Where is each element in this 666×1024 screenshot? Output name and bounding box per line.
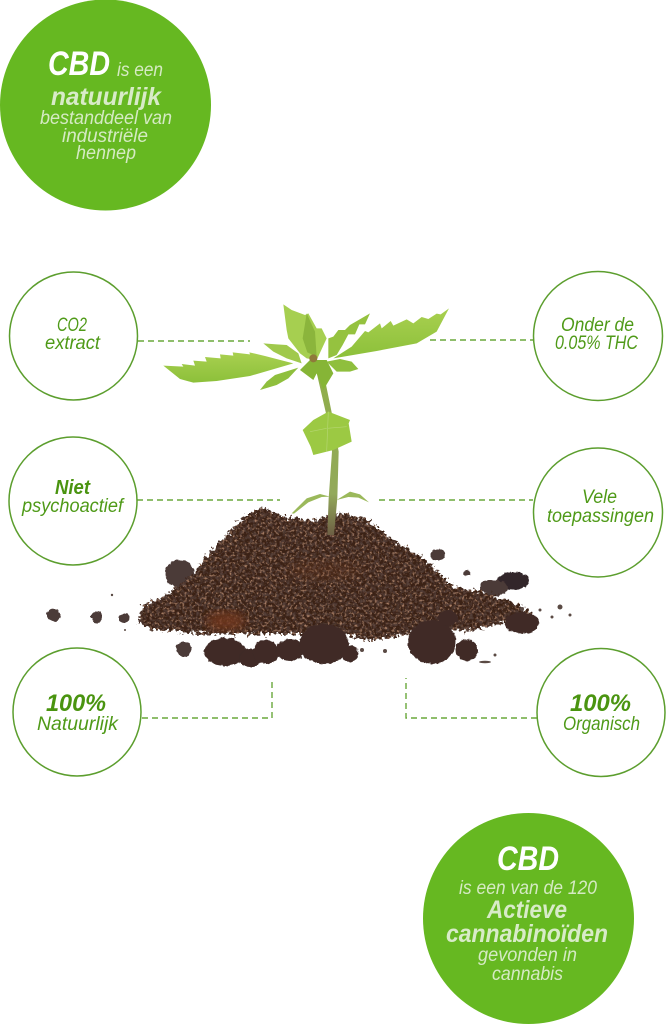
callout: CBD natural component: is een: [117, 60, 163, 81]
soil crumbs: [111, 594, 572, 663]
badge: Niet psychoactief: Niet: [55, 477, 91, 499]
connector: not psychoactive: [137, 499, 280, 501]
badge: Vele toepassingen: toepassingen: [547, 506, 654, 527]
callout: CBD natural component: bestanddeel van: [40, 108, 172, 129]
badge: Niet psychoactief: psychoactief: [21, 496, 125, 517]
connector: 100% organic: [406, 678, 537, 718]
large right leaf: [333, 308, 449, 358]
badge: 100% Organisch: 100%: [570, 690, 631, 717]
callout: CBD active cannabinoids: gevonden in: [478, 945, 577, 966]
badge: CO2 extract: [10, 272, 138, 400]
badge: Onder de 0.05% THC: [534, 272, 662, 400]
badge: Onder de 0.05% THC: 0.05% THC: [555, 333, 638, 354]
callout: CBD natural component: industriële: [62, 126, 148, 147]
badge: 100% Natuurlijk: Natuurlijk: [37, 714, 120, 735]
upper right small leaf: [328, 313, 370, 358]
lower central leaves: [300, 360, 333, 390]
loose clods behind: [48, 549, 529, 656]
stem: [316, 370, 339, 535]
connector: under 0.05% THC: [430, 339, 533, 341]
badge: 100% Natuurlijk: [13, 648, 141, 776]
illustration: soil pile: [48, 507, 572, 667]
connector: many applications: [379, 499, 533, 501]
callout: CBD active cannabinoids: is een van de 120: [459, 878, 597, 899]
badge: 100% Organisch: [537, 648, 665, 776]
small lower left leaf: [260, 368, 298, 390]
badge: Vele toepassingen: Vele: [582, 487, 617, 508]
small left leaf: [263, 343, 302, 363]
callout: CBD natural component: hennep: [76, 143, 136, 164]
badge: 100% Organisch: Organisch: [563, 714, 640, 735]
badge: 100% Natuurlijk: 100%: [46, 690, 106, 717]
badge: CO2 extract: CO2: [57, 315, 87, 336]
badge: Niet psychoactief: [9, 437, 137, 565]
illustration: cannabis seedling: [163, 304, 449, 535]
callout: CBD active cannabinoids: [423, 813, 634, 1024]
leaf node: [309, 354, 317, 362]
reddish soil patches: [206, 611, 246, 631]
callout: CBD natural component: natuurlijk: [51, 83, 162, 111]
soil mound: [138, 507, 532, 640]
connector: CO2 extract: [138, 340, 250, 342]
callout: CBD natural component: [0, 0, 211, 210]
callout: CBD active cannabinoids: CBD: [497, 840, 559, 878]
badge: CO2 extract: extract: [45, 333, 101, 354]
badge: Onder de 0.05% THC: Onder de: [561, 315, 634, 336]
badge: Vele toepassingen: [534, 448, 662, 577]
middle leaf: [303, 412, 352, 455]
center top leaf: [283, 304, 327, 360]
callout: CBD active cannabinoids: cannabinoïden: [446, 920, 608, 948]
connector: 100% natural: [142, 678, 272, 718]
foreground clods: [204, 610, 539, 667]
small right leaf: [327, 359, 358, 372]
callout: CBD active cannabinoids: Actieve: [486, 896, 567, 924]
callout: CBD natural component: CBD: [48, 45, 110, 83]
cotyledon leaves: [292, 494, 330, 514]
callout: CBD active cannabinoids: cannabis: [492, 964, 563, 985]
large left leaf: [163, 352, 293, 383]
